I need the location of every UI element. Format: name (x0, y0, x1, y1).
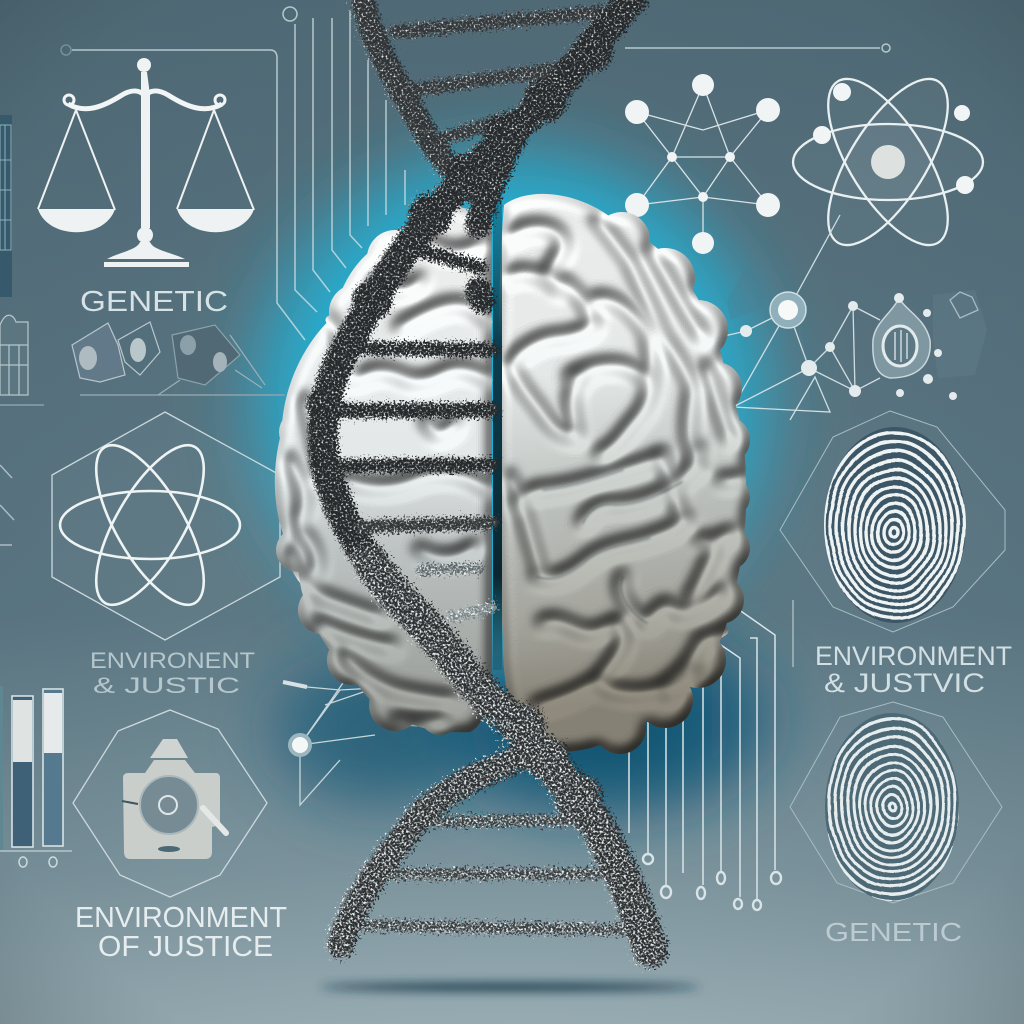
hexagon panel: camera and magnifier (73, 710, 267, 897)
brain: right hemisphere (498, 194, 750, 754)
heading: environment and justice left: ENVIRONENT (90, 648, 255, 673)
circuit lines with nodes, lower right (629, 600, 793, 910)
hexagon panel: atom (52, 412, 280, 640)
network and glass icons, right (720, 215, 987, 420)
circuit lines: upper left (61, 7, 890, 340)
brain: central fissure (493, 200, 502, 670)
heading: environment of justice: ENVIRONMENT (75, 902, 287, 934)
brain: crisp fold lines (537, 470, 682, 623)
heading: environment and justice right: & JUSTVIC (824, 668, 985, 698)
heading: genetic lower right: GENETIC (825, 917, 962, 947)
icon: scales of justice (38, 58, 254, 267)
icon row: faint glass faces (72, 322, 285, 395)
icon: atom top right (793, 61, 983, 263)
network nodes, lower left of brain (283, 679, 384, 805)
ground shadow (320, 983, 700, 991)
DNA: upper section (306, 0, 632, 562)
heading: environment and justice left: & JUSTIC (93, 673, 240, 698)
molecule diagram (625, 74, 780, 254)
test tubes (0, 686, 72, 867)
fingerprint panel: lower (790, 700, 1002, 915)
heading: environment and justice right (815, 641, 1012, 698)
heading: environment and justice left (90, 648, 255, 698)
heading: environment and justice right: ENVIRONMENT (815, 641, 1012, 671)
left edge fragments: building icons (0, 115, 44, 545)
heading: genetic upper left: GENETIC (80, 286, 228, 318)
DNA double helix (306, 0, 650, 950)
DNA: lower section (340, 562, 650, 950)
heading: environment of justice (75, 902, 287, 963)
brain (275, 194, 750, 754)
fingerprint panel: upper (780, 410, 1005, 640)
brain: left hemisphere (275, 196, 492, 735)
heading: environment of justice: OF JUSTICE (98, 931, 273, 963)
